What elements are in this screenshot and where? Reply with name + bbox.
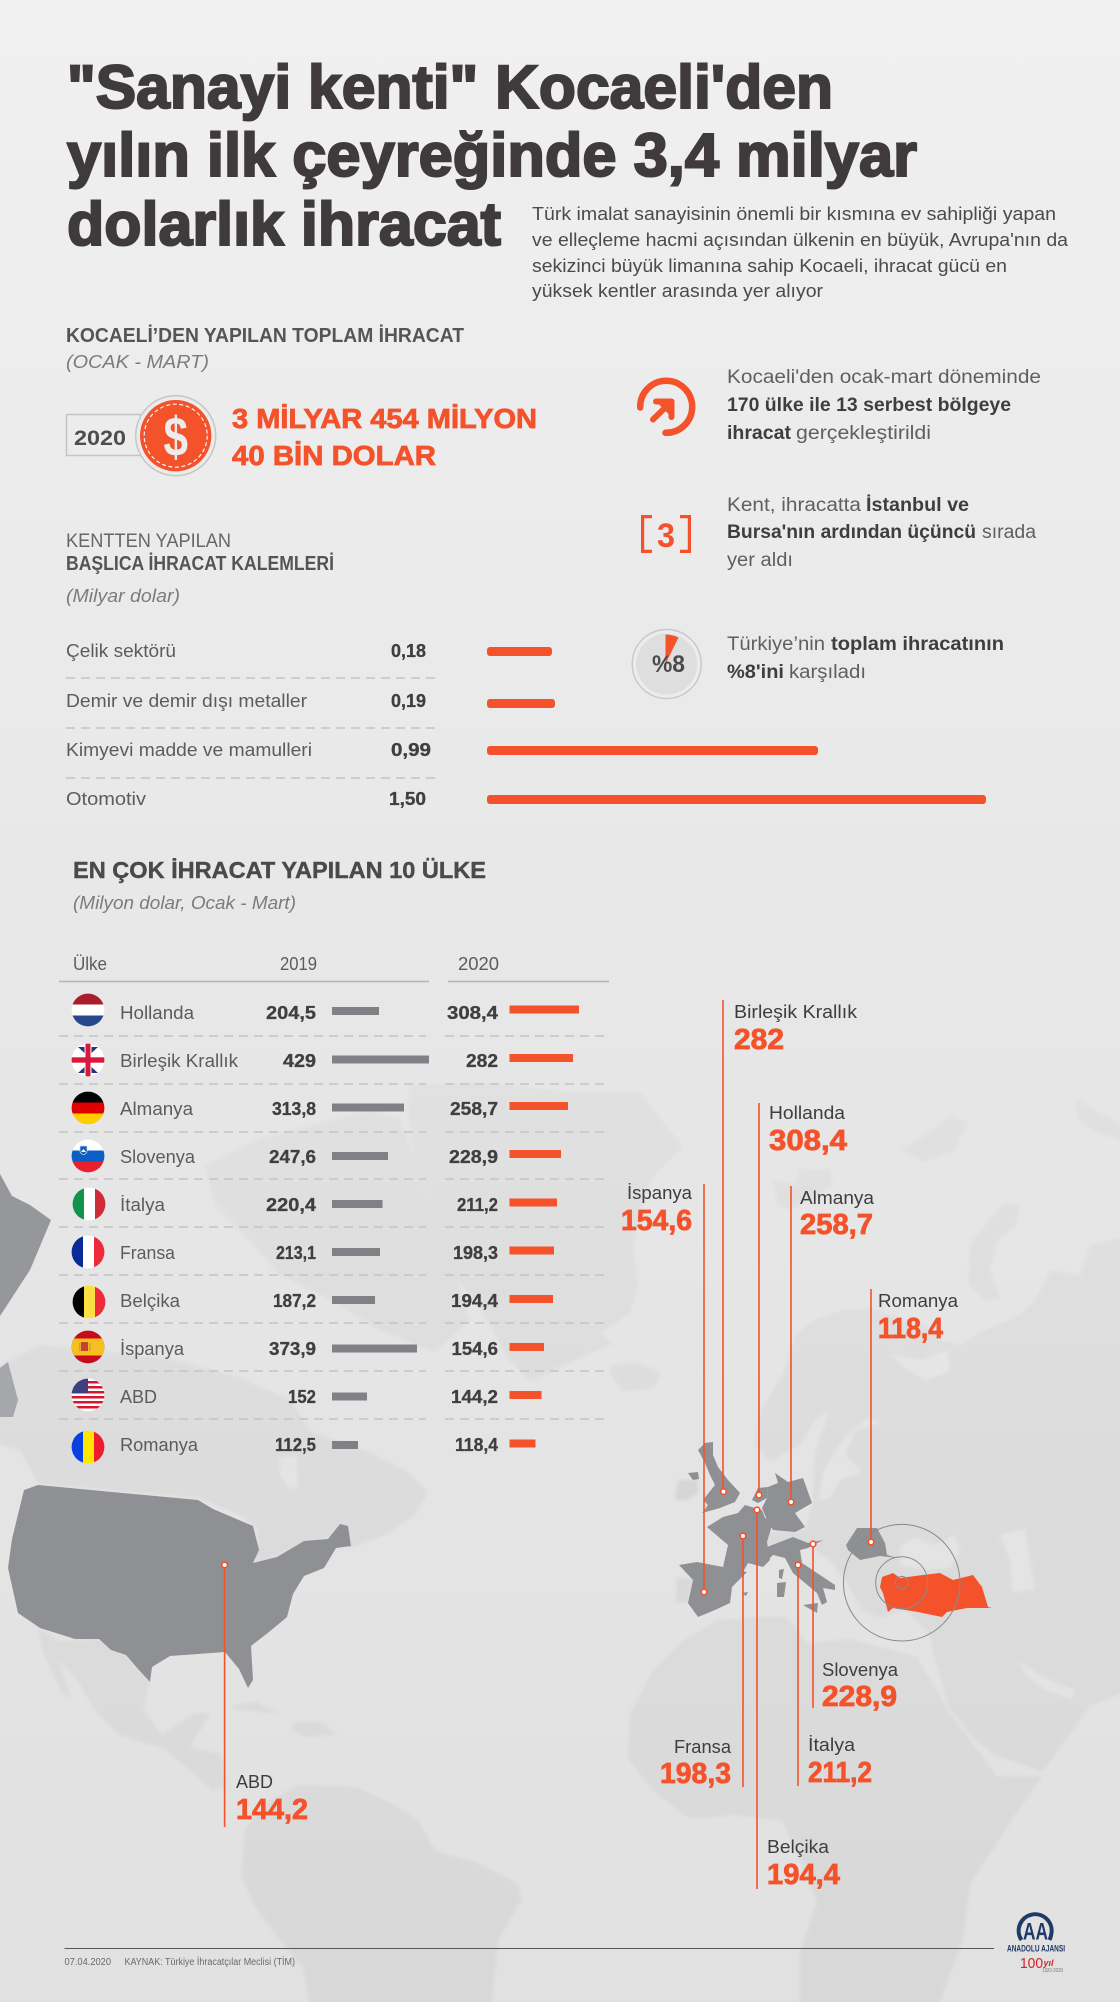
row: Slovenya (71, 1139, 561, 1174)
country: USA (8, 1485, 351, 1688)
logo: Anadolu Ajansı (1007, 1914, 1065, 1974)
logo: Anadolu Ajansı: AA (1023, 1918, 1048, 1946)
logo: Anadolu Ajansı: 100 (1020, 1955, 1043, 1972)
country: Alaska south (0, 1362, 18, 1417)
sea: Caspian (1000, 1528, 1035, 1592)
logo: Anadolu Ajansı: ANADOLU AJANSI (1007, 1944, 1065, 1954)
callout: Almanya: Almanya (800, 1187, 875, 1208)
heading: main export items (66, 531, 334, 606)
callout: ABD (222, 1562, 308, 1827)
landmass: Eurasia (755, 1235, 1120, 1772)
row: ABD: 144,2 (451, 1387, 498, 1407)
callout: İspanya: İspanya (627, 1182, 693, 1203)
flag: France (71, 1235, 106, 1269)
title: dolarlık ihracat (67, 190, 501, 258)
landmass: Ireland (675, 1480, 698, 1500)
callout: Romanya: 118,4 (878, 1313, 943, 1345)
flag: Belgium (72, 1285, 107, 1319)
icon: 8 percent pie: %8 (652, 651, 685, 678)
total export badge (66, 396, 216, 476)
country: France and Belgium (707, 1505, 773, 1572)
fact: 170 countries: 170 ülke ile 13 serbest bölgeye (727, 395, 1011, 416)
Turkey radar circles (843, 1524, 960, 1641)
callout: Romanya: Romanya (878, 1290, 959, 1311)
intro text: ve elleçleme hacmi açısından ülkenin en büyük, Avrupa'nın da (532, 230, 1069, 250)
flag: Netherlands (71, 993, 105, 1028)
landmass: Canada (0, 1345, 428, 1563)
row: Belçika: 187,2 (273, 1291, 316, 1311)
row: Belçika: 194,4 (451, 1291, 498, 1311)
country: Turkey (880, 1573, 992, 1617)
row: Almanya: Almanya (120, 1099, 194, 1119)
fact: third rank: yer aldı (727, 550, 793, 571)
intro text: Türk imalat sanayisinin önemli bir kısmına ev sahipliği yapan (532, 204, 1056, 224)
icon: third place bracket: 3 (657, 517, 675, 555)
country: Italy and Slovenia (767, 1537, 835, 1613)
row: Hollanda (71, 993, 579, 1028)
intro text: yüksek kentler arasında yer alıyor (532, 281, 823, 301)
fact: third rank (727, 495, 1036, 571)
row: İspanya (71, 1330, 544, 1364)
heading: top 10 countries: EN ÇOK İHRACAT YAPILAN 10 ÜLKE (73, 857, 486, 883)
country: Spain (679, 1562, 748, 1617)
year box: 2020 (74, 426, 126, 450)
row: Otomotiv (66, 789, 986, 809)
country: Germany (762, 1473, 812, 1532)
highlighted countries (0, 1174, 992, 1688)
row: Fransa (71, 1235, 554, 1269)
callout: Fransa (660, 1533, 746, 1790)
row: Kimyevi madde ve mamulleri (66, 740, 818, 760)
sea: White Sea (890, 1350, 950, 1380)
heading: main export items: KENTTEN YAPILAN (66, 531, 231, 552)
fact: 170 countries (727, 367, 1041, 444)
row: Otomotiv: Otomotiv (66, 789, 146, 809)
year box (66, 414, 140, 456)
heading: total exports: KOCAELİ’DEN YAPILAN TOPLAM İHRACAT (66, 324, 464, 347)
fact: third rank: Bursa'nın ardından üçüncü (727, 522, 976, 543)
landmass: Canadian arctic islands (205, 1110, 470, 1352)
country: Romania (846, 1528, 897, 1560)
callout: ABD: ABD (236, 1771, 273, 1792)
callout: Belçika: Belçika (767, 1836, 830, 1857)
table header: 2019 (280, 954, 317, 974)
row: Birleşik Krallık: 429 (283, 1051, 316, 1071)
row: Demir ve demir dışı metaller (66, 691, 555, 711)
country: Netherlands (752, 1487, 768, 1503)
table header: Ülke (73, 954, 107, 974)
row: Hollanda: 308,4 (447, 1003, 498, 1023)
title: "Sanayi kenti" Kocaeli'den (67, 53, 833, 121)
fact: share of exports: karşıladı (789, 662, 866, 683)
landmass: Africa (628, 1617, 1043, 2002)
fact: share of exports (727, 634, 1004, 683)
heading: total exports: (OCAK - MART) (66, 352, 209, 372)
row: Çelik sektörü: Çelik sektörü (66, 641, 176, 661)
country: United Kingdom (698, 1442, 740, 1513)
row: Slovenya: 228,9 (449, 1147, 498, 1167)
row: Hollanda: 204,5 (266, 1003, 316, 1023)
row: Demir ve demir dışı metaller: 0,19 (391, 691, 426, 711)
footer (64, 1948, 994, 1968)
row: Fransa: 198,3 (453, 1243, 498, 1263)
row: Almanya: 258,7 (450, 1099, 498, 1119)
landmass: Franz Josef islands (900, 1115, 968, 1162)
fact: 170 countries: Kocaeli'den ocak-mart döneminde (727, 367, 1041, 388)
icon: dollar coin: $ (164, 405, 188, 468)
callout: Hollanda: 308,4 (769, 1125, 847, 1157)
logo: Anadolu Ajansı: yıl (1043, 1958, 1054, 1968)
fact: 170 countries: gerçekleştirildi (796, 423, 931, 444)
row: İtalya: 220,4 (266, 1195, 316, 1215)
total export value: 3 MİLYAR 454 MİLYON (232, 403, 537, 434)
row: İtalya (72, 1187, 557, 1221)
table header (59, 954, 609, 982)
row: Belçika: Belçika (120, 1291, 181, 1311)
landmass: Iceland (610, 1362, 660, 1392)
flag: United Kingdom (71, 1043, 105, 1077)
row: Fransa: 213,1 (276, 1243, 316, 1263)
row: ABD: ABD (120, 1387, 157, 1407)
row: Hollanda: Hollanda (120, 1003, 195, 1023)
callout: Almanya (788, 1186, 875, 1505)
country: Northern Ireland (688, 1472, 699, 1480)
row: Fransa: Fransa (120, 1243, 176, 1263)
sea: Baltic (818, 1418, 882, 1500)
landmass: South America (241, 1784, 522, 2002)
row: ABD (71, 1378, 542, 1412)
icon: export arrow ring (640, 381, 692, 433)
heading: top 10 countries: (Milyon dolar, Ocak - Mart) (73, 893, 296, 913)
callout: Birleşik Krallık: 282 (734, 1024, 784, 1056)
country: Alaska north (0, 1174, 51, 1316)
fact: third rank: sırada (982, 522, 1036, 543)
row: Çelik sektörü (66, 641, 552, 661)
heading: top 10 countries (73, 857, 486, 913)
logo: Anadolu Ajansı: 1920-2020 (1042, 1968, 1063, 1974)
row: Kimyevi madde ve mamulleri: Kimyevi madde ve mamulleri (66, 740, 312, 760)
callout: Slovenya (810, 1541, 899, 1713)
row: Romanya: 112,5 (275, 1435, 316, 1455)
fact: third rank: İstanbul ve (866, 495, 969, 516)
flag: Romania (71, 1430, 106, 1464)
row: Romanya (71, 1430, 536, 1464)
heading: main export items: BAŞLICA İHRACAT KALEMLERİ (66, 552, 334, 575)
total export value (232, 403, 537, 471)
title (67, 53, 917, 258)
row: İtalya: İtalya (120, 1195, 166, 1215)
landmass: Novaya Zemlya (968, 1203, 1020, 1300)
fact: third rank: Kent, ihracatta (727, 495, 861, 516)
table header: 2020 (458, 954, 499, 974)
callout: Slovenya: Slovenya (822, 1659, 899, 1680)
row: İspanya: İspanya (120, 1339, 185, 1359)
row: Almanya (71, 1091, 568, 1126)
callout: İspanya (621, 1182, 707, 1595)
row: Birleşik Krallık: Birleşik Krallık (120, 1051, 239, 1071)
callout: Belçika (754, 1507, 840, 1891)
flag: Italy (72, 1187, 107, 1221)
callout: İspanya: 154,6 (621, 1205, 692, 1237)
footer: KAYNAK: Türkiye İhracatçılar Meclisi (TİM) (124, 1955, 295, 1968)
callout: Slovenya: 228,9 (822, 1681, 897, 1713)
callout: Fransa: 198,3 (660, 1758, 731, 1790)
row: Belçika (72, 1285, 553, 1319)
landmass: Svalbard (773, 1170, 833, 1210)
fact: 170 countries: ihracat (727, 423, 792, 444)
callout: Almanya: 258,7 (800, 1209, 873, 1241)
row: Çelik sektörü: 0,18 (391, 641, 426, 661)
fact: share of exports: %8'ini (727, 662, 784, 683)
footer: 07.04.2020 (64, 1957, 111, 1968)
row: Slovenya: Slovenya (120, 1147, 196, 1167)
row: Kimyevi madde ve mamulleri: 0,99 (391, 740, 431, 760)
callout: İtalya: İtalya (808, 1734, 856, 1755)
row: İtalya: 211,2 (457, 1195, 498, 1215)
landmass: Mexico and Central America (38, 1628, 226, 1791)
callout: Hollanda: Hollanda (769, 1102, 846, 1123)
row: ABD: 152 (288, 1387, 316, 1407)
callout: İtalya: 211,2 (808, 1757, 872, 1789)
world map background (0, 1082, 1120, 2002)
heading: main export items: (Milyar dolar) (66, 586, 180, 606)
landmass: Caribbean islands (229, 1702, 338, 1737)
row: Birleşik Krallık (71, 1043, 573, 1077)
row: Romanya: 118,4 (455, 1435, 498, 1455)
heading: total exports (66, 324, 464, 372)
row: Romanya: Romanya (120, 1435, 199, 1455)
callout: İtalya (795, 1562, 872, 1789)
sea: Persian Gulf (1018, 1660, 1075, 1700)
bar chart: export items (66, 641, 986, 809)
callout: ABD: 144,2 (236, 1794, 308, 1826)
total export value: 40 BİN DOLAR (232, 440, 436, 471)
icon: dollar coin (136, 396, 216, 476)
fact: share of exports: toplam ihracatının (831, 634, 1004, 655)
flag: Germany (71, 1091, 105, 1126)
flag: Slovenia (71, 1139, 105, 1174)
flag: USA (71, 1378, 105, 1412)
callout: Belçika: 194,4 (767, 1859, 840, 1891)
icon: third place bracket (643, 517, 689, 555)
sea: Black Sea (900, 1534, 960, 1570)
row: İspanya: 373,9 (269, 1339, 316, 1359)
icon: 8 percent pie (632, 630, 701, 698)
title: yılın ilk çeyreğinde 3,4 milyar (67, 121, 917, 189)
row: Almanya: 313,8 (272, 1099, 316, 1119)
intro text: sekizinci büyük limanına sahip Kocaeli, ihracat gücü en (532, 256, 1007, 276)
row: Demir ve demir dışı metaller: Demir ve demir dışı metaller (66, 691, 307, 711)
callout: Hollanda (756, 1102, 847, 1498)
sea: Hudson Bay (280, 1456, 298, 1490)
row: Otomotiv: 1,50 (389, 789, 426, 809)
landmass: Severnaya Zemlya (1075, 1098, 1120, 1145)
row: İspanya: 154,6 (452, 1339, 498, 1359)
table: top 10 countries (59, 954, 609, 1464)
intro text (532, 204, 1069, 301)
row: Birleşik Krallık: 282 (466, 1051, 498, 1071)
landmass: Greenland (408, 1082, 683, 1381)
flag: Spain (71, 1330, 105, 1364)
callout: Birleşik Krallık: Birleşik Krallık (734, 1001, 858, 1022)
row: Slovenya: 247,6 (269, 1147, 316, 1167)
callout: Birleşik Krallık (721, 1000, 858, 1494)
landmass: Portugal (676, 1578, 693, 1603)
callout: Fransa: Fransa (674, 1736, 732, 1757)
callout: Romanya (868, 1289, 959, 1545)
fact: share of exports: Türkiye’nin (727, 634, 825, 655)
